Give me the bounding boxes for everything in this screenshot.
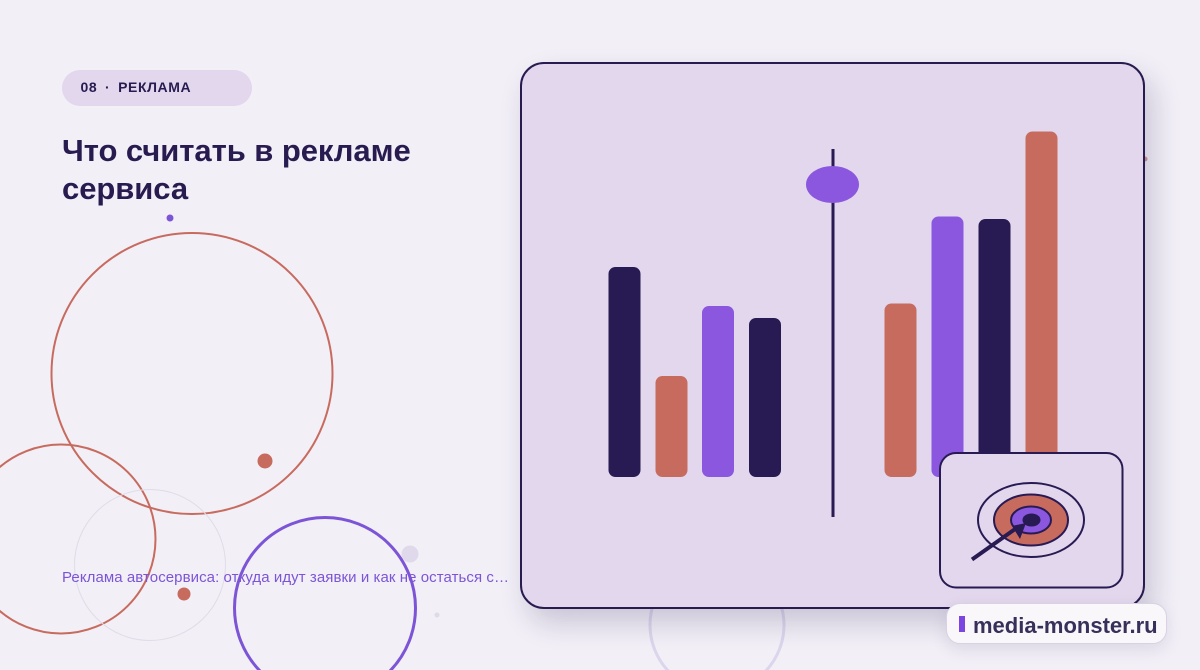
- divider line with oval marker: [806, 149, 859, 517]
- subtitle: Реклама автосервиса: откуда идут заявки и как не остаться с…: [62, 569, 509, 586]
- purple ring: [234, 518, 416, 670]
- brand name: media-monster.ru: [973, 613, 1158, 638]
- tag pill: [62, 70, 252, 106]
- pale grey ring: [74, 490, 226, 640]
- title: сервиса: [62, 171, 188, 206]
- tag pill: 08 · РЕКЛАМА: [80, 79, 191, 95]
- tiny grey dot: [434, 612, 440, 618]
- icon: target: [978, 483, 1084, 557]
- title: [62, 133, 411, 206]
- title: Что считать в рекламе: [62, 133, 411, 168]
- coral dot: [258, 454, 272, 468]
- small coral dot: [178, 588, 190, 600]
- small purple dot: [166, 214, 174, 222]
- arrow: [972, 523, 1026, 560]
- brand mark: [959, 616, 965, 632]
- right bars: [884, 132, 1058, 477]
- left bars: [608, 267, 781, 477]
- pale ring under the panel: [650, 558, 784, 670]
- tiny coral dot at panel edge: [1142, 156, 1148, 162]
- brand badge: [946, 603, 1167, 644]
- target inset: [940, 453, 1122, 588]
- left coral ring: [0, 444, 156, 634]
- illustration panel: [520, 62, 1145, 609]
- large coral ring: [52, 233, 332, 514]
- pale lilac dot: [402, 546, 418, 562]
